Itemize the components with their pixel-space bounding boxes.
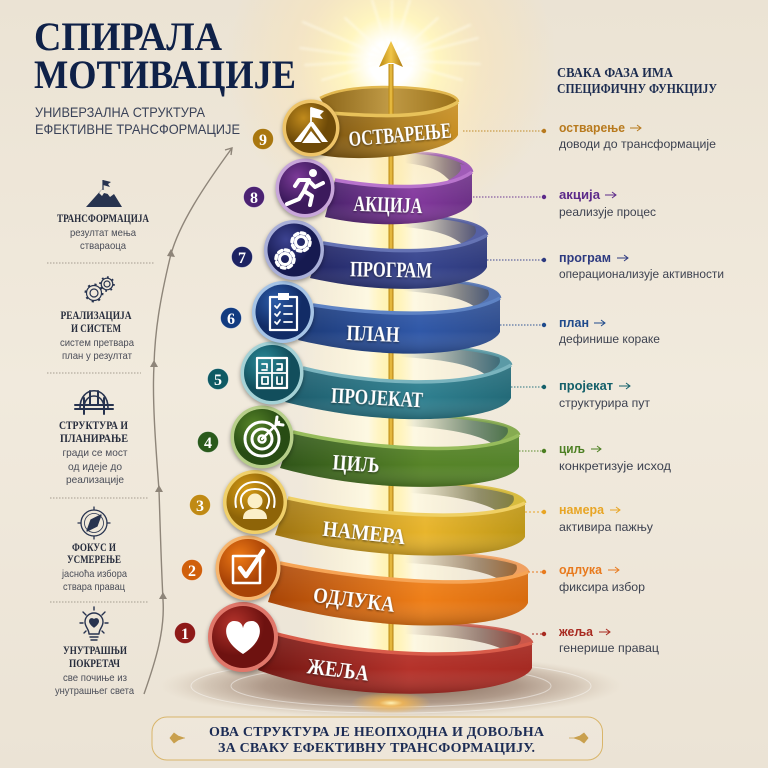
description	[70, 227, 136, 252]
ornament left	[170, 733, 185, 743]
heading	[60, 310, 132, 335]
description: систем претвара	[60, 337, 134, 349]
left stage: inner drive	[55, 607, 134, 697]
function row: пројекат	[511, 378, 651, 410]
subtitle	[35, 104, 240, 137]
description	[62, 447, 128, 486]
band label: НАМЕРА	[321, 516, 407, 549]
ring 7: програм	[264, 220, 487, 289]
step numbers	[174, 128, 274, 644]
description: унутрашњег света	[55, 685, 134, 697]
heading	[59, 420, 128, 445]
icon: mountain with flag	[86, 180, 122, 207]
left stage: realization and system	[60, 277, 134, 362]
band	[320, 102, 458, 158]
heading	[63, 645, 127, 670]
banner text: ЗА СВАКУ ЕФЕКТИВНУ ТРАНСФОРМАЦИЈУ.	[218, 741, 535, 756]
heading: ПОКРЕТАЧ	[69, 658, 120, 670]
description	[60, 337, 134, 362]
number 2: 2	[188, 563, 196, 580]
badge with mountain flag icon	[282, 100, 340, 156]
band	[268, 563, 528, 625]
function row: циљ: циљ	[559, 441, 585, 456]
number 8	[244, 186, 264, 208]
description: ствараоца	[80, 240, 126, 252]
heading: И СИСТЕМ	[71, 323, 121, 335]
function row: план: дефинише кораке	[559, 332, 660, 346]
heading: УСМЕРЕЊЕ	[67, 554, 121, 566]
ring 2: одлука	[216, 536, 528, 625]
number 5: 5	[214, 372, 222, 389]
description: ствара правац	[63, 581, 125, 593]
ascending curved arrow	[144, 148, 232, 694]
title: МОТИВАЦИЈЕ	[34, 52, 296, 97]
number 1: 1	[181, 626, 189, 643]
description: резултат мења	[70, 227, 136, 239]
ring 8: акција	[276, 158, 472, 224]
function row: акција	[473, 187, 656, 219]
function row: пројекат: структурира пут	[559, 396, 651, 410]
heading: СТРУКТУРА И	[59, 420, 128, 432]
number 3: 3	[196, 498, 204, 515]
left stage: structure and planning	[59, 391, 128, 486]
function row: намера	[525, 502, 653, 534]
function row: жеља: жеља	[558, 624, 594, 639]
right heading: СПЕЦИФИЧНУ ФУНКЦИЈУ	[557, 81, 717, 96]
number 2	[182, 560, 202, 580]
function row: одлука: одлука	[559, 562, 603, 577]
badge with blueprint icon	[240, 342, 304, 404]
ring 9: остварење	[282, 100, 458, 158]
badge with target icon	[230, 406, 294, 468]
banner text	[209, 725, 545, 756]
function row: остварење: остварење	[559, 120, 625, 135]
ring 1: жеља	[208, 602, 532, 694]
heading: ПЛАНИРАЊЕ	[60, 433, 128, 445]
ring 4: циљ	[230, 406, 519, 487]
description: од идеје до	[68, 461, 122, 473]
heading: УНУТРАШЊИ	[63, 645, 127, 657]
description	[55, 672, 134, 697]
heading: ФОКУС И	[72, 542, 116, 554]
number 1	[174, 622, 196, 644]
icon: compass	[78, 507, 110, 539]
band label: ПЛАН	[346, 320, 400, 347]
function row: одлука	[528, 562, 645, 594]
function row: план: план	[559, 315, 589, 330]
description: све почиње из	[63, 672, 127, 684]
function row: намера: намера	[559, 502, 605, 517]
base platform ripples	[159, 654, 623, 718]
band label: ЖЕЉА	[306, 653, 370, 686]
badge with person in focus icon	[223, 470, 287, 534]
function row: остварење: доводи до трансформације	[559, 137, 716, 151]
icon: light bulb with heart	[80, 607, 108, 640]
band label: ОСТВАРЕЊЕ	[348, 118, 452, 151]
function row: циљ	[519, 441, 671, 473]
description: јасноћа избора	[61, 568, 127, 580]
function row: програм: програм	[559, 250, 611, 265]
heading	[67, 542, 121, 566]
banner text: ОВА СТРУКТУРА ЈЕ НЕОПХОДНА И ДОВОЉНА	[209, 725, 545, 740]
icon: gears	[86, 277, 114, 302]
number 3	[190, 494, 210, 516]
band	[310, 235, 487, 289]
function row: жеља: генерише правац	[559, 641, 659, 655]
conclusion banner	[152, 717, 602, 760]
badge with gears icon	[264, 220, 324, 280]
function row: акција: реализује процес	[559, 205, 656, 219]
glow behind the central pole	[226, 0, 556, 700]
number 9: 9	[259, 132, 267, 149]
band	[258, 632, 532, 694]
band	[325, 172, 472, 224]
badge with checkbox icon	[216, 536, 280, 600]
band label: АКЦИЈА	[353, 191, 423, 218]
function row: одлука: фиксира избор	[559, 580, 645, 594]
band label: ОДЛУКА	[312, 582, 396, 617]
function row: пројекат: пројекат	[559, 378, 613, 393]
function row: програм	[487, 250, 724, 281]
central golden arrow	[379, 41, 403, 654]
number 7	[232, 246, 252, 268]
ornament right	[569, 733, 588, 743]
ring 6: план	[252, 281, 500, 354]
number 6: 6	[227, 311, 235, 328]
function row: циљ: конкретизује исход	[559, 459, 671, 473]
heading: РЕАЛИЗАЦИЈА	[60, 310, 132, 322]
function row: програм: операционализује активности	[559, 267, 724, 281]
icon: bridge	[75, 391, 113, 414]
badge with runner icon	[276, 158, 334, 218]
function row: акција: акција	[559, 187, 601, 202]
badge with clipboard icon	[252, 281, 314, 343]
band label: ПРОЈЕКАТ	[330, 383, 424, 412]
heading: ТРАНСФОРМАЦИЈА	[57, 213, 150, 225]
function row: жеља	[532, 624, 659, 655]
subtitle: УНИВЕРЗАЛНА СТРУКТУРА	[35, 104, 206, 120]
number 6	[220, 308, 242, 328]
function row: намера: активира пажњу	[559, 520, 653, 534]
number 5	[208, 368, 228, 390]
title	[34, 14, 296, 97]
description: гради се мост	[62, 447, 128, 459]
subtitle: ЕФЕКТИВНЕ ТРАНСФОРМАЦИЈЕ	[35, 121, 240, 137]
ring 3: намера	[223, 470, 525, 556]
function row: остварење	[463, 120, 716, 151]
function row: план	[500, 315, 660, 346]
band	[280, 432, 519, 487]
back halves of the spiral	[320, 87, 532, 652]
band	[275, 498, 525, 556]
description: план у резултат	[62, 350, 132, 362]
title: СПИРАЛА	[34, 14, 222, 59]
number 4	[198, 432, 218, 452]
ring 5: пројекат	[240, 342, 511, 419]
number 8: 8	[250, 190, 258, 207]
badge with heart icon	[208, 602, 278, 672]
band label: ПРОГРАМ	[350, 256, 432, 283]
left stage: focus and direction	[61, 507, 127, 593]
left stage: transformation	[57, 180, 150, 252]
description	[61, 568, 127, 593]
number 4: 4	[204, 435, 212, 452]
band	[285, 365, 511, 419]
band label: ЦИЉ	[332, 449, 380, 478]
number 9	[252, 128, 274, 150]
description: реализације	[66, 474, 124, 486]
right heading	[557, 65, 717, 96]
right heading: СВАКА ФАЗА ИМА	[557, 65, 673, 80]
number 7: 7	[238, 250, 246, 267]
band	[298, 298, 500, 354]
